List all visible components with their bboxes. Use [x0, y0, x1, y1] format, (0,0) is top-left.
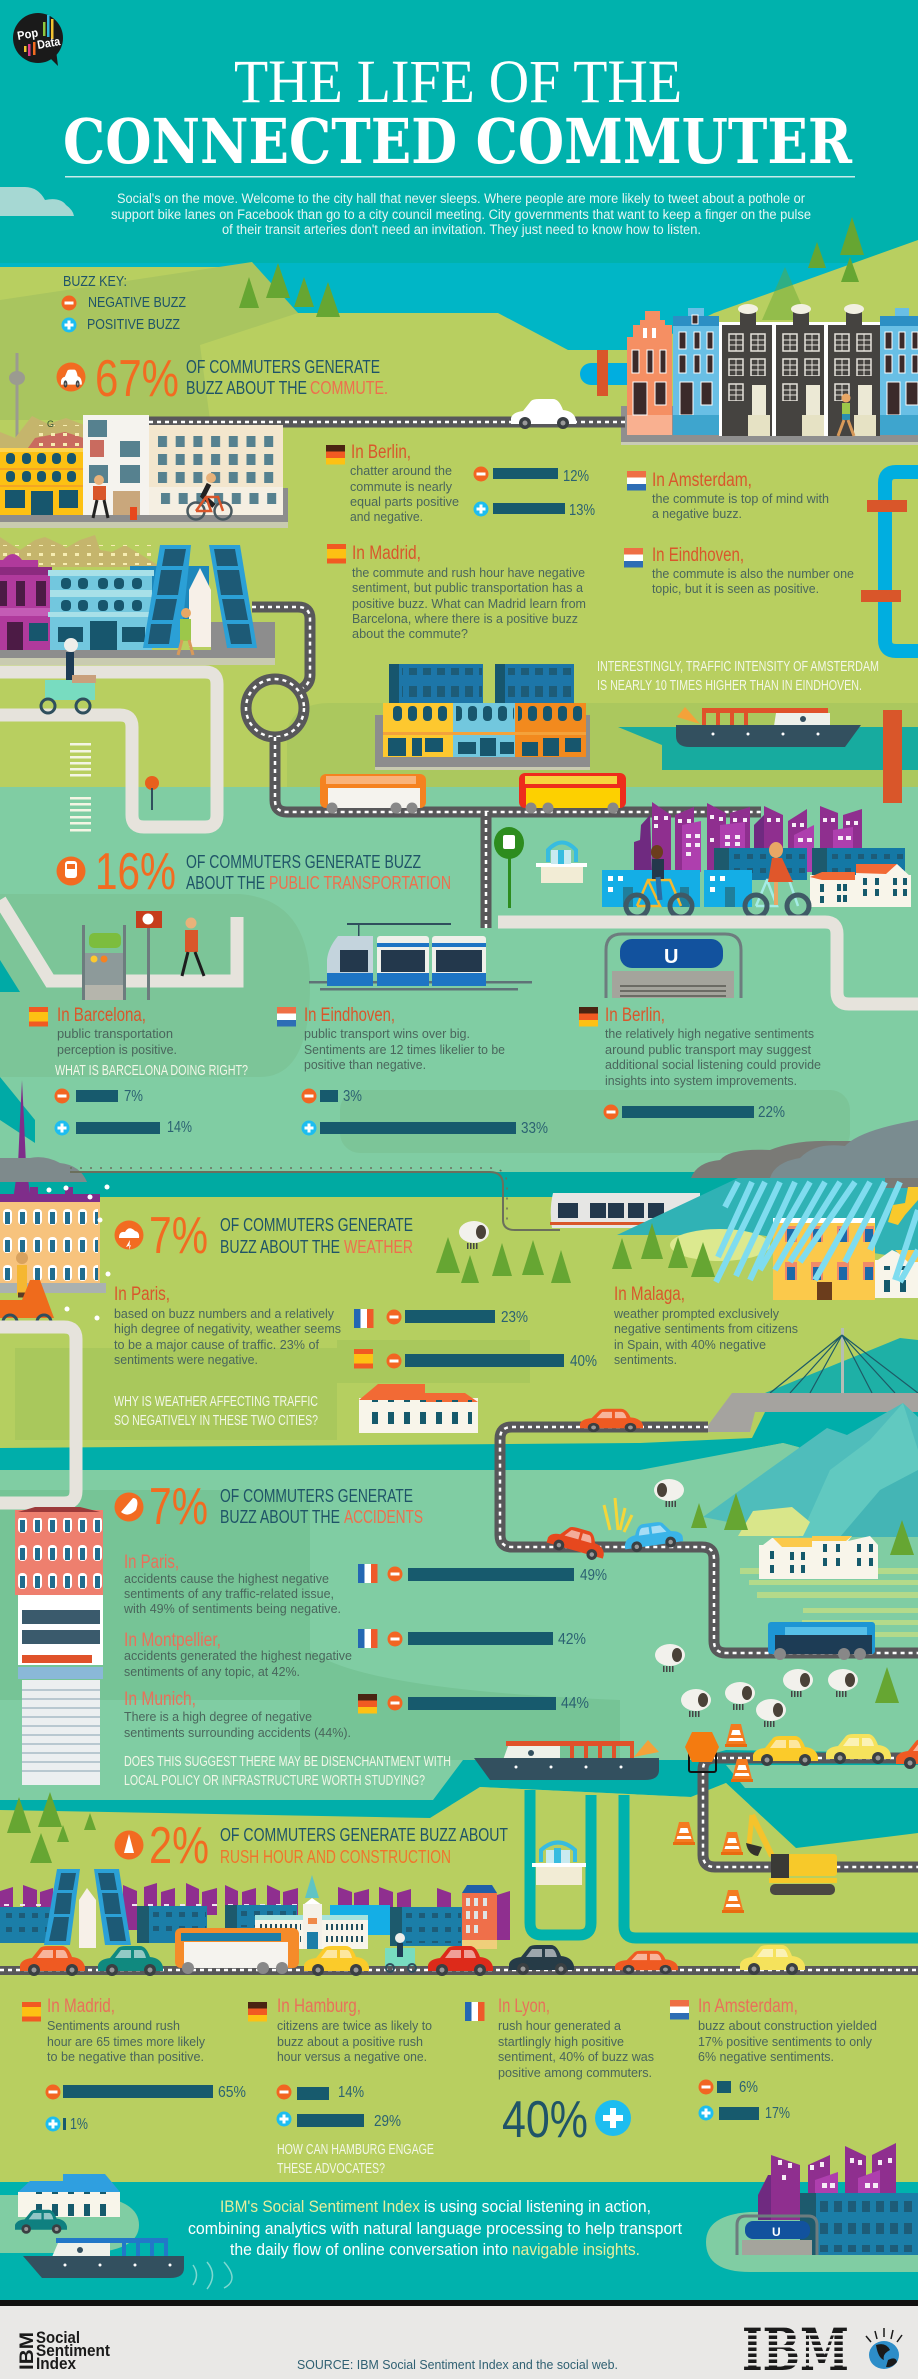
- text block: Paris accidents: In Paris,: [124, 1552, 179, 1573]
- text block: Lyon rush hour: startlingly high positive: [498, 2034, 624, 2049]
- background: green lower shade: [287, 703, 918, 787]
- background: hill shading: [0, 262, 298, 420]
- sheep group: [654, 1479, 858, 1727]
- text block: Madrid commute: [327, 543, 586, 641]
- snow dots: [46, 1184, 110, 1320]
- dark blue buildings: [714, 848, 905, 880]
- fountain lower: [532, 1842, 586, 1885]
- text block: Paris weather: sentiments were negative.: [114, 1352, 258, 1367]
- text block: Barcelona transit: [29, 1005, 248, 1136]
- text block: Amsterdam construction: In Amsterdam,: [698, 1996, 798, 2017]
- railway track: [70, 1168, 560, 1230]
- logo: IBM Social Sentiment Index: IBM: [17, 2332, 38, 2370]
- scooter rider in Paris: [0, 1252, 54, 1329]
- train: [550, 1193, 700, 1228]
- text block: Madrid rush hour: 65%: [218, 2084, 246, 2101]
- person standing in Madrid: [178, 608, 193, 655]
- text block: Lyon rush hour: rush hour generated a: [498, 2018, 622, 2033]
- skyline panorama: [0, 1869, 510, 1949]
- background: closing teal band: [0, 2182, 918, 2302]
- road: construction: [703, 1758, 918, 1867]
- title: THE LIFE OF THE: [234, 49, 682, 116]
- closing statement: [188, 2197, 682, 2259]
- text block: Berlin transit: In Berlin,: [605, 1005, 665, 1026]
- text block: Paris accidents: 49%: [580, 1567, 607, 1584]
- text block: Malaga weather: [613, 1284, 798, 1367]
- heading: 16% public transportation: 16%: [95, 843, 176, 901]
- person walking in Amsterdam: [838, 394, 854, 436]
- crash illustration: [545, 1498, 684, 1563]
- blue bus: [768, 1622, 875, 1660]
- mountain teal behind Malaga: [617, 1178, 918, 1260]
- heading: 16% public transportation: PUBLIC TRANSPORTATION: [269, 872, 451, 893]
- text block: Munich accidents: There is a high degree of negative: [124, 1709, 312, 1724]
- intro text: of their transit arteries don't need an invitation. They just need to know how to listen.: [222, 222, 701, 237]
- text block: Madrid commute: positive buzz. What can Madrid learn from: [352, 596, 586, 611]
- text block: Eindhoven transit: 33%: [521, 1120, 548, 1137]
- text block: Munich accidents: sentiments surrounding accidents (44%).: [124, 1725, 351, 1740]
- trees: weather: [436, 1223, 715, 1283]
- Paris building: [0, 1187, 106, 1293]
- text block: Malaga weather: In Malaga,: [614, 1284, 685, 1305]
- text block: Madrid rush hour: to be negative than positive.: [47, 2049, 204, 2064]
- text block: Amsterdam construction: 6% negative sentiments.: [698, 2049, 834, 2064]
- icon: globe with rays: [866, 2328, 902, 2369]
- text block: Madrid commute: Barcelona, where there is a positive buzz: [352, 611, 578, 626]
- white house Malaga: [875, 1250, 918, 1298]
- closing boat: [23, 2238, 184, 2278]
- text block: Malaga weather: in Spain, with 40% negative: [614, 1337, 766, 1352]
- road: accident loop: [500, 1427, 918, 1653]
- text block: Hamburg rush hour: 29%: [374, 2113, 401, 2130]
- stop sign: [685, 1732, 719, 1772]
- text block: Berlin transit: insights into system improvements.: [605, 1073, 797, 1088]
- text block: Hamburg rush hour: citizens are twice as likely to: [277, 2018, 432, 2033]
- buzz key legend: NEGATIVE BUZZ: [88, 294, 186, 311]
- text block: Amsterdam construction: 17%: [765, 2105, 790, 2122]
- bus: orange: [320, 774, 426, 814]
- background: teal river and bay: [0, 1412, 918, 1500]
- text block: Montpellier accidents: [124, 1629, 586, 1679]
- text block: Amsterdam commute: a negative buzz.: [652, 506, 742, 521]
- river: blue canal right: [861, 472, 918, 651]
- text block: Barcelona transit: WHAT IS BARCELONA DOING RIGHT?: [55, 1063, 248, 1079]
- text block: Hamburg rush hour: buzz about a positive rush: [277, 2034, 423, 2049]
- bars: weather comparison: 23%: [501, 1309, 528, 1326]
- bright blue buildings: [602, 870, 752, 907]
- text block: Berlin commute: 12%: [563, 468, 589, 485]
- river: blue pill with bridge: [580, 350, 640, 396]
- intro text: Social's on the move. Welcome to the city hall that never sleeps. Where people are more likely to tweet about a pothole or: [117, 191, 805, 206]
- heading: 7% weather: BUZZ ABOUT THE: [220, 1236, 340, 1257]
- text block: Barcelona transit: 14%: [167, 1119, 192, 1136]
- pavement Barcelona: [0, 900, 237, 981]
- rain: [716, 1182, 918, 1282]
- tan houses behind Madrid: [0, 535, 158, 567]
- excavator: [746, 1815, 837, 1895]
- icon: red sports car: [580, 1409, 643, 1432]
- buzz key legend: POSITIVE BUZZ: [87, 316, 180, 333]
- logo: IBM Social Sentiment Index: Sentiment: [36, 2341, 110, 2360]
- heading: 7% accidents: [114, 1478, 423, 1536]
- text block: Berlin commute: In Berlin,: [351, 442, 411, 463]
- question: weather: SO NEGATIVELY IN THESE TWO CITIES?: [114, 1413, 318, 1429]
- pavement Paris: [0, 1327, 76, 1503]
- buzz key legend: [62, 273, 186, 333]
- text block: Montpellier accidents: In Montpellier,: [124, 1630, 221, 1651]
- lightning: [888, 1187, 918, 1225]
- background: third green section: [0, 1783, 918, 2182]
- background: mint section: [0, 787, 918, 1177]
- text block: Berlin transit: around public transport may suggest: [605, 1042, 811, 1057]
- text block: Eindhoven transit: [277, 1005, 548, 1137]
- closing statement: IBM's Social Sentiment Index: [220, 2197, 420, 2216]
- vehicles in traffic: [20, 1928, 805, 1976]
- road: roundabout and section link: [246, 607, 761, 928]
- text block: Madrid commute: sentiment, but public transportation has a: [352, 580, 584, 595]
- text block: Amsterdam commute: In Amsterdam,: [652, 470, 752, 491]
- text block: Paris weather: high degree of negativity, weather seems: [114, 1321, 341, 1336]
- text block: Paris weather: In Paris,: [114, 1284, 170, 1305]
- text block: Montpellier accidents: sentiments of any topic, at 42%.: [124, 1664, 300, 1679]
- text block: Munich accidents: 44%: [561, 1695, 589, 1712]
- title: [63, 49, 852, 178]
- text block: Madrid rush hour: [22, 1996, 246, 2133]
- question: accidents: [124, 1754, 451, 1789]
- heading: 7% accidents: ACCIDENTS: [344, 1506, 423, 1527]
- background: accidents shade: [0, 1490, 620, 1760]
- text block: Madrid commute: about the commute?: [352, 626, 468, 641]
- question: weather: WHY IS WEATHER AFFECTING TRAFFIC: [114, 1394, 318, 1410]
- text block: Hamburg rush hour: hour versus a negative one.: [277, 2049, 427, 2064]
- text block: Amsterdam construction: 6%: [739, 2079, 758, 2096]
- white house accidents: [759, 1536, 878, 1579]
- closing car: [15, 2210, 67, 2234]
- text block: Amsterdam construction: 17% positive sentiments to only: [698, 2034, 872, 2049]
- background: mint strip under road: [726, 1765, 918, 1788]
- bars: weather comparison: [354, 1309, 597, 1370]
- clouds left: [0, 1157, 87, 1182]
- text block: Hamburg rush hour: In Hamburg,: [277, 1996, 361, 2017]
- background: teal water lower: [0, 1750, 918, 1848]
- question: weather: [114, 1394, 318, 1429]
- storm clouds right: [691, 1120, 918, 1188]
- text block: Paris weather: [114, 1284, 341, 1367]
- text block: Berlin commute: equal parts positive: [350, 494, 459, 509]
- Amsterdam houses: [621, 304, 918, 445]
- orange road sign: [145, 776, 159, 810]
- heading: 67% commute: OF COMMUTERS GENERATE: [186, 356, 380, 377]
- background: teal channel: [0, 1172, 918, 1200]
- question: accidents: LOCAL POLICY OR INFRASTRUCTURE WORTH STUDYING?: [124, 1773, 425, 1789]
- metro entrance: [82, 925, 126, 1000]
- text block: Eindhoven transit: positive than negative.: [304, 1057, 426, 1072]
- logo: IBM Social Sentiment Index: Index: [36, 2354, 76, 2373]
- closing U station: U: [772, 2225, 781, 2239]
- Malaga palace: [773, 1218, 875, 1300]
- text block: Malaga weather: negative sentiments from citizens: [614, 1321, 798, 1336]
- background: mint shaded blob: [0, 894, 310, 1077]
- teal water left: [0, 960, 20, 992]
- heading: 7% weather: 7%: [149, 1207, 208, 1265]
- text block: Paris accidents: sentiments of any traffic-related issue,: [124, 1586, 334, 1601]
- teal left triangle: [0, 1077, 35, 1143]
- boat: [676, 707, 861, 747]
- fountain: [536, 842, 587, 883]
- text block: Montpellier accidents: 42%: [558, 1631, 586, 1648]
- text block: Berlin commute: [326, 442, 595, 524]
- closing U station: [737, 2216, 817, 2255]
- sheep near train: [459, 1221, 489, 1249]
- heading: 2% rush hour: 2%: [149, 1817, 209, 1875]
- background: water behind the hills: [0, 263, 918, 433]
- text block: Barcelona transit: public transportation: [57, 1026, 173, 1041]
- heading: 7% weather: [114, 1207, 413, 1265]
- text block: Montpellier accidents: accidents generated the highest negative: [124, 1648, 352, 1663]
- icon: Pop Data logo: [13, 13, 63, 66]
- canals: [530, 1790, 918, 1938]
- text block: Berlin commute: and negative.: [350, 509, 423, 524]
- bus: red and yellow: [519, 773, 626, 814]
- white house centre: [359, 1384, 478, 1433]
- cones: [673, 1724, 753, 1913]
- Eiffel tower: [13, 1080, 31, 1200]
- text block: Madrid commute: In Madrid,: [352, 543, 421, 564]
- text block: Eindhoven transit: 3%: [343, 1088, 362, 1105]
- intro text: [111, 191, 811, 237]
- heading: 7% accidents: 7%: [149, 1478, 208, 1536]
- bars: weather comparison: 40%: [570, 1353, 597, 1370]
- background: mint lower shaded blob: [340, 1090, 850, 1153]
- text block: Paris accidents: with 49% of sentiments being negative.: [123, 1601, 341, 1616]
- closing statement: navigable insights.: [512, 2240, 640, 2259]
- background: second green section: [0, 1197, 918, 1449]
- heading: 67% commute: 67%: [95, 350, 179, 408]
- text block: Eindhoven commute: [624, 545, 854, 596]
- tan houses behind Berlin: [0, 416, 104, 448]
- traffic jam road: [0, 1966, 918, 1975]
- U-Bahn station: U: [664, 946, 678, 968]
- text block: Hamburg rush hour: THESE ADVOCATES?: [277, 2161, 385, 2177]
- closing blue building: [800, 2193, 918, 2255]
- scooter rider: [41, 638, 96, 713]
- cyclists: [626, 842, 809, 917]
- background: footer: [0, 2306, 918, 2379]
- text block: Madrid rush hour: 1%: [70, 2116, 88, 2133]
- text block: Munich accidents: [124, 1689, 589, 1740]
- text block: Eindhoven commute: In Eindhoven,: [652, 545, 744, 566]
- closing statement: the daily flow of online conversation into: [230, 2240, 508, 2259]
- boat wake: [193, 2262, 232, 2289]
- text block: Berlin transit: 22%: [758, 1104, 785, 1121]
- text block: Paris weather: to be a major cause of traffic. 23% of: [114, 1337, 319, 1352]
- text block: Madrid rush hour: In Madrid,: [47, 1996, 115, 2017]
- heading: 7% weather: WEATHER: [344, 1236, 413, 1257]
- zebra crossing: [70, 743, 91, 832]
- person walking in Berlin: [93, 475, 108, 518]
- heading: 7% accidents: OF COMMUTERS GENERATE: [220, 1485, 413, 1506]
- text block: Lyon rush hour: [465, 1996, 654, 2149]
- closing house: [18, 2174, 120, 2217]
- footer black rule: [0, 2300, 918, 2306]
- heading: 2% rush hour: OF COMMUTERS GENERATE BUZZ ABOUT: [220, 1824, 508, 1845]
- text block: Barcelona transit: perception is positive.: [57, 1042, 177, 1057]
- closing statement: is using social listening in action,: [424, 2197, 651, 2216]
- heading: 7% weather: OF COMMUTERS GENERATE: [220, 1214, 413, 1235]
- icon: Pop Data logo: Pop: [16, 26, 39, 43]
- closing statement: combining analytics with natural language processing to help transport: [188, 2219, 682, 2238]
- logo: IBM Social Sentiment Index: Social: [36, 2328, 80, 2347]
- text block: Paris accidents: accidents cause the highest negative: [124, 1571, 329, 1586]
- background: mint shore: [640, 1443, 918, 1540]
- central buildings: [375, 664, 590, 770]
- Berlin buildings: [0, 415, 288, 528]
- pavement right: [498, 922, 918, 1004]
- source line: SOURCE: IBM Social Sentiment Index and the social web.: [297, 2357, 618, 2372]
- buzz key legend: BUZZ KEY:: [63, 273, 127, 290]
- text block: Amsterdam commute: [627, 470, 829, 521]
- text block: Berlin transit: the relatively high negative sentiments: [605, 1026, 814, 1041]
- text block: Paris accidents: [123, 1552, 607, 1616]
- U-Bahn station: [606, 934, 741, 998]
- purple buildings: [634, 802, 862, 872]
- cloud top left: [0, 187, 74, 216]
- metro sign: [136, 911, 162, 1000]
- trees: first hills: [239, 217, 864, 320]
- text block: Eindhoven transit: Sentiments are 12 times likelier to be: [304, 1042, 505, 1057]
- trees: accidents: [691, 1493, 914, 1703]
- icon: Pop Data logo: Data: [36, 34, 61, 52]
- person walking in Barcelona: [182, 918, 204, 976]
- text block: Madrid rush hour: hour are 65 times more likely: [47, 2034, 205, 2049]
- white house: [810, 864, 911, 907]
- text block: Lyon rush hour: 40%: [502, 2091, 588, 2149]
- heading: 67% commute: [56, 350, 388, 408]
- tan houses behind Berlin: G: [47, 419, 54, 429]
- mountains right: [703, 1403, 918, 1537]
- background: first green section: [0, 240, 918, 790]
- heading: 67% commute: BUZZ ABOUT THE: [186, 377, 307, 398]
- note: traffic intensity: [597, 659, 879, 694]
- closing purple buildings: [758, 2143, 896, 2220]
- boat lower: [474, 1740, 659, 1780]
- text block: Madrid commute: the commute and rush hour have negative: [352, 565, 585, 580]
- field strips: [740, 1568, 918, 1637]
- pink hotel and tower: [15, 1507, 103, 1785]
- text block: Berlin commute: chatter around the: [350, 463, 452, 478]
- logo: IBM Social Sentiment Index: [17, 2328, 110, 2373]
- icon: white car: [511, 399, 576, 429]
- background: weather darker blob: [15, 1340, 530, 1440]
- text block: Lyon rush hour: positive among commuters.: [498, 2065, 652, 2080]
- text block: Berlin commute: commute is nearly: [350, 479, 452, 494]
- text block: Eindhoven transit: In Eindhoven,: [304, 1005, 395, 1026]
- harbour water: [618, 727, 918, 770]
- closing left mint blob: [0, 2195, 139, 2253]
- text block: Eindhoven transit: public transport wins over big.: [304, 1026, 470, 1041]
- closing right mint blob: [706, 2212, 918, 2272]
- heading: 16% public transportation: ABOUT THE: [186, 872, 265, 893]
- text block: Eindhoven commute: topic, but it is seen as positive.: [652, 581, 819, 596]
- pale hill: [670, 1229, 770, 1261]
- text block: Madrid rush hour: Sentiments around rush: [47, 2018, 180, 2033]
- text block: Paris weather: based on buzz numbers and a relatively: [114, 1306, 334, 1321]
- text block: Barcelona transit: In Barcelona,: [57, 1005, 146, 1026]
- yellow cars queue: [753, 1734, 918, 1769]
- text block: Amsterdam commute: the commute is top of mind with: [652, 491, 829, 506]
- heading: 2% rush hour: [114, 1817, 508, 1875]
- trees: rush hour: [7, 1792, 96, 1863]
- road: top: [149, 416, 625, 428]
- heading: 67% commute: COMMUTE.: [310, 377, 388, 398]
- red bridge: [883, 710, 902, 803]
- tram: [309, 923, 532, 990]
- cable-stayed bridge: [703, 1328, 918, 1432]
- text block: Malaga weather: sentiments.: [614, 1352, 677, 1367]
- text block: Hamburg rush hour: [248, 1996, 434, 2177]
- text block: Amsterdam construction: [670, 1996, 877, 2122]
- text block: Berlin commute: 13%: [569, 502, 595, 519]
- pavements: [0, 672, 217, 827]
- text block: Munich accidents: In Munich,: [124, 1689, 196, 1710]
- text block: Eindhoven commute: the commute is also the number one: [652, 566, 854, 581]
- pale meadow: [738, 1507, 810, 1536]
- text block: Hamburg rush hour: HOW CAN HAMBURG ENGAGE: [277, 2142, 434, 2158]
- intro text: support bike lanes on Facebook than go to a city council meeting. City governments that want to keep a finger on the pulse: [111, 207, 811, 222]
- text block: Malaga weather: weather prompted exclusively: [613, 1306, 779, 1321]
- TV tower: [9, 353, 25, 448]
- station sign: [494, 827, 524, 908]
- text block: Barcelona transit: 7%: [124, 1088, 143, 1105]
- heading: 7% accidents: BUZZ ABOUT THE: [220, 1506, 340, 1527]
- text block: Lyon rush hour: In Lyon,: [498, 1996, 550, 2017]
- background: accidents mint section: [0, 1470, 918, 1805]
- question: accidents: DOES THIS SUGGEST THERE MAY BE DISENCHANTMENT WITH: [124, 1754, 451, 1770]
- text block: Amsterdam construction: buzz about construction yielded: [698, 2018, 877, 2033]
- heading: 16% public transportation: OF COMMUTERS GENERATE BUZZ: [186, 851, 421, 872]
- heading: 16% public transportation: [56, 843, 451, 901]
- text block: Hamburg rush hour: 14%: [338, 2084, 364, 2101]
- cyclist in Berlin: [188, 473, 232, 520]
- text block: Berlin transit: additional social listening could provide: [605, 1057, 821, 1072]
- text block: Lyon rush hour: sentiment, 40% of buzz was: [498, 2049, 654, 2064]
- Madrid buildings: [0, 545, 275, 665]
- heading: 2% rush hour: RUSH HOUR AND CONSTRUCTION: [220, 1846, 451, 1867]
- text block: Berlin transit: [579, 1005, 821, 1121]
